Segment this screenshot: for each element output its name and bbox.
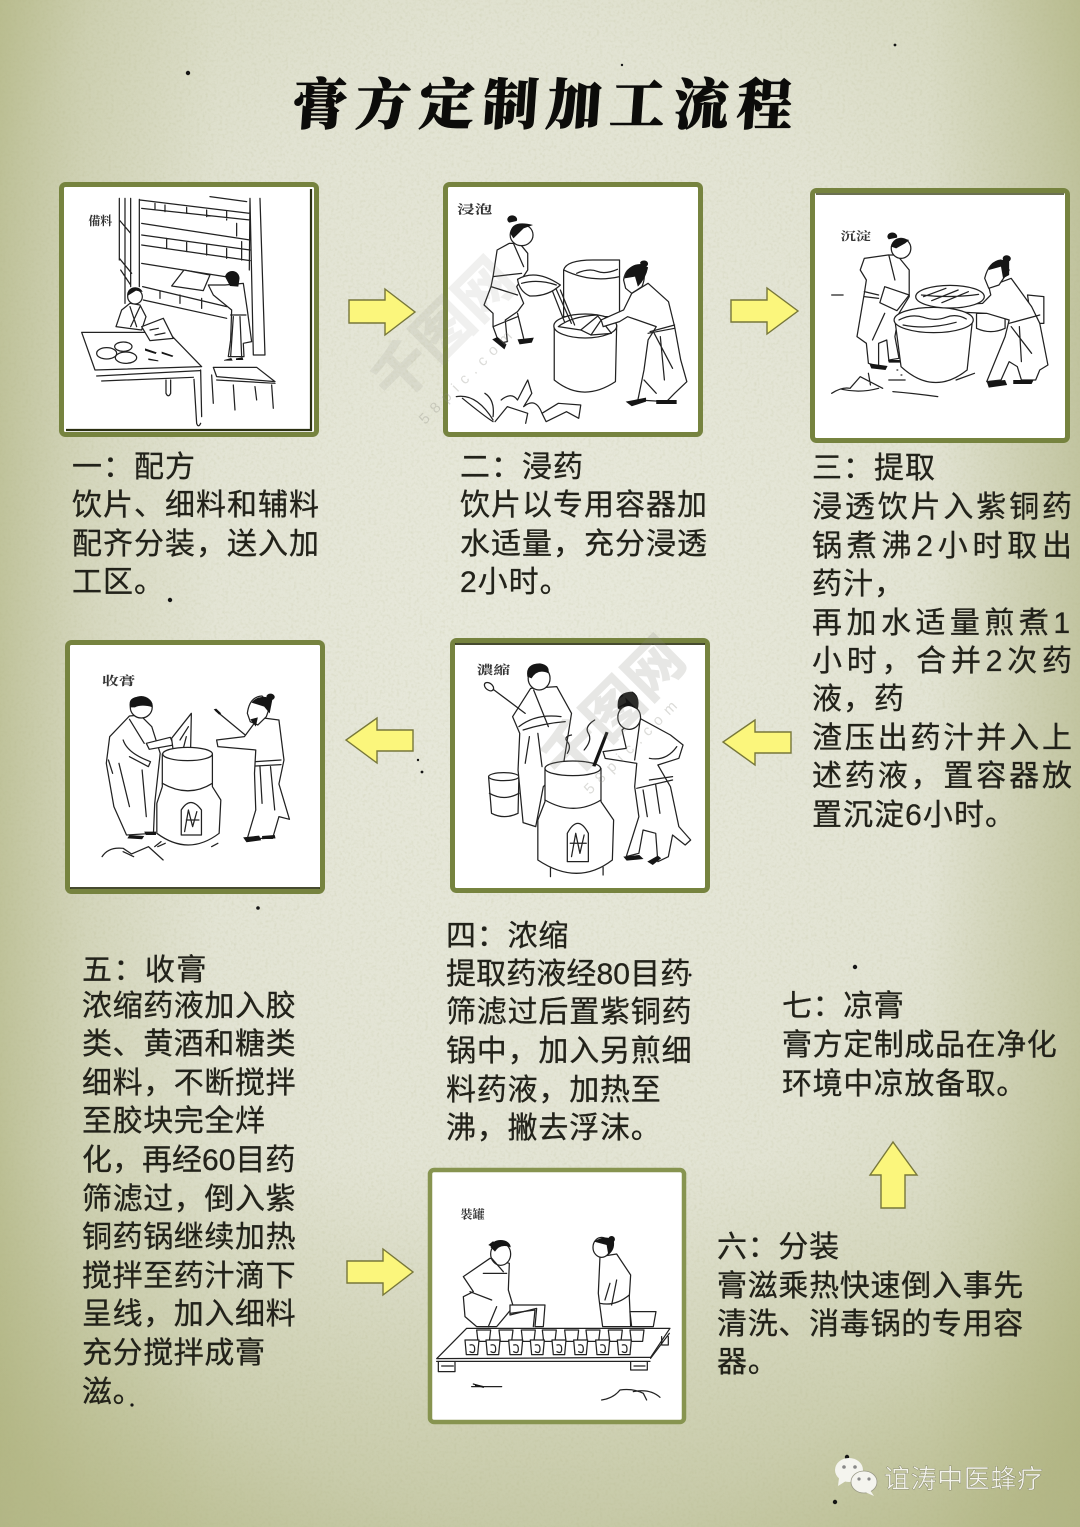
credit: wechat account [835, 1458, 1043, 1496]
table with herbs [82, 332, 202, 370]
jars back row [477, 1330, 644, 1341]
text block: step 5 [82, 954, 296, 1409]
tray [510, 1305, 545, 1327]
text block: step 2: 饮片以专用容器加 [460, 489, 708, 522]
text block: step 5: 类、黄酒和糖类 [82, 1028, 296, 1061]
text block: step 1 [72, 451, 320, 599]
figure: right man [603, 717, 691, 862]
stove [538, 768, 614, 873]
text block: step 3: 小时，合并2次药 [812, 645, 1072, 678]
arrow: step 5 to 6 [347, 1249, 413, 1295]
panel: step 5 illustration [68, 642, 322, 892]
panel: step 2 illustration [446, 184, 700, 434]
text block: step 6: 器。 [717, 1346, 778, 1379]
watermark [359, 246, 698, 798]
arrow: step 6 to 7 [870, 1142, 917, 1208]
watermark: 千图网 [529, 625, 698, 794]
text block: step 3: 锅煮沸2小时取出 [812, 530, 1072, 563]
steam [566, 720, 595, 753]
text block: step 6: 清洗、消毒锅的专用容 [717, 1308, 1024, 1341]
figure: right woman [598, 1254, 631, 1327]
illustration: soaking herbs: 浸泡 [457, 202, 492, 217]
illustration: extraction: 沉淀 [841, 229, 872, 243]
figure: right man [950, 278, 1048, 382]
text block: step 1: 一：配方 [72, 451, 196, 484]
text block: step 3: 药汁， [812, 568, 904, 601]
text block: step 7 [782, 990, 1057, 1101]
text block: step 3: 液，药 [812, 683, 904, 716]
stirrer [592, 732, 609, 767]
text block: step 1: 配齐分装，送入加 [72, 528, 320, 561]
jars front row [465, 1340, 631, 1355]
text block: step 4 [446, 920, 692, 1145]
text block: step 2: 2小时。 [460, 566, 571, 599]
account name: 谊涛中医蜂疗 [884, 1464, 1043, 1494]
watermark: 58pic.com [416, 323, 521, 428]
tilted basin [880, 287, 909, 311]
text block: step 5: 搅拌至药汁滴下 [82, 1260, 296, 1293]
text block: step 6: 六：分装 [717, 1231, 840, 1264]
title: 膏方定制加工流程 [290, 75, 803, 136]
bucket [489, 777, 519, 817]
text block: step 7: 环境中凉放备取。 [782, 1068, 1027, 1101]
illustration: final thickening: 收膏 [102, 673, 136, 688]
figure: left man [513, 687, 572, 827]
illustration: soaking herbs [456, 202, 687, 423]
panel: step 4 illustration [452, 640, 708, 890]
figure: left woman [463, 1258, 513, 1327]
text block: step 3: 渣压出药汁并入上 [812, 722, 1072, 755]
stove [157, 754, 221, 845]
text block: step 5: 细料，不断搅拌 [82, 1067, 296, 1100]
text block: step 4: 锅中，加入另煎细 [446, 1035, 692, 1068]
illustration: concentrating: 濃縮 [477, 662, 511, 677]
lower vat [554, 325, 617, 392]
text block: step 3: 置沉淀6小时。 [812, 799, 1015, 832]
illustration: concentrating [477, 662, 691, 877]
text block: step 5: 充分搅拌成膏 [82, 1337, 266, 1370]
arrow: step 4 to 5 [346, 718, 413, 763]
bench [437, 1328, 670, 1359]
figure: standing apothecary [208, 283, 252, 357]
figure: right man [217, 717, 289, 838]
illustration: preparing herbs: 備料 [88, 213, 112, 228]
stool [213, 367, 275, 382]
watermark: 58pic.com [581, 693, 686, 798]
text block: step 3: 浸透饮片入紫铜药 [812, 491, 1072, 524]
illustration: extraction [832, 229, 1048, 397]
watermark: 千图网 [359, 246, 528, 415]
text block: step 4: 料药液，加热至 [446, 1074, 662, 1107]
figure: woman [601, 283, 687, 402]
bucket behind [977, 295, 1044, 332]
figure: left man [857, 255, 909, 367]
arrow: step 1 to 2 [349, 289, 415, 335]
icon: wechat bubbles [835, 1458, 877, 1496]
text block: step 3: 述药液，置容器放 [812, 760, 1072, 793]
text block: step 5: 至胶块完全烊 [82, 1105, 266, 1138]
arrow: step 2 to 3 [731, 288, 798, 334]
text block: step 2: 二：浸药 [460, 451, 584, 484]
text block: step 5: 浓缩药液加入胶 [82, 990, 296, 1023]
text block: step 4: 沸，撇去浮沫。 [446, 1112, 662, 1145]
panel: step 6 illustration [430, 1170, 684, 1422]
text block: step 6 [717, 1231, 1024, 1379]
text block: step 2: 水适量，充分浸透 [460, 528, 708, 561]
tray [916, 285, 984, 308]
figure: seated apothecary [116, 303, 146, 330]
ground [832, 370, 974, 397]
illustration: filling containers: 裝罐 [461, 1206, 485, 1221]
text block: step 5: 五：收膏 [82, 954, 207, 987]
text block: step 1: 饮片、细料和辅料 [72, 489, 320, 522]
illustration: filling containers [437, 1206, 670, 1400]
panel: step 3 illustration [812, 190, 1068, 440]
text block: step 4: 提取药液经80目药 [446, 958, 691, 991]
text block: step 5: 滋。 [82, 1376, 143, 1409]
upper vat [564, 260, 620, 317]
bucket [630, 1312, 656, 1327]
text block: step 7: 膏方定制成品在净化 [782, 1029, 1057, 1062]
text block: step 5: 呈线，加入细料 [82, 1298, 296, 1331]
text block: step 3 [812, 452, 1072, 832]
text block: step 5: 化，再经60目药 [82, 1144, 296, 1177]
text block: step 5: 铜药锅继续加热 [82, 1221, 296, 1254]
plants [456, 380, 581, 423]
ground [102, 842, 163, 860]
text block: step 3: 三：提取 [812, 452, 935, 485]
text block: step 6: 膏滋乘热快速倒入事先 [717, 1270, 1024, 1303]
text block: step 5: 筛滤过，倒入紫 [82, 1183, 296, 1216]
illustration: final thickening [102, 673, 289, 860]
text block: step 1: 工区。 [72, 566, 165, 599]
steam [172, 713, 191, 754]
text block: step 3: 再加水适量煎煮1 [812, 607, 1070, 640]
text block: step 4: 四：浓缩 [446, 920, 569, 953]
text block: step 4: 筛滤过后置紫铜药 [446, 996, 692, 1029]
figure: pouring man [484, 243, 528, 343]
panel: step 1 illustration [62, 184, 316, 434]
text block: step 7: 七：凉膏 [782, 990, 904, 1023]
ground [472, 1384, 660, 1400]
figure: left woman [106, 715, 160, 835]
arrow: step 3 to 4 [723, 720, 791, 765]
illustration: preparing herbs [82, 197, 275, 426]
text block: step 2 [460, 451, 708, 599]
vat [895, 320, 972, 383]
